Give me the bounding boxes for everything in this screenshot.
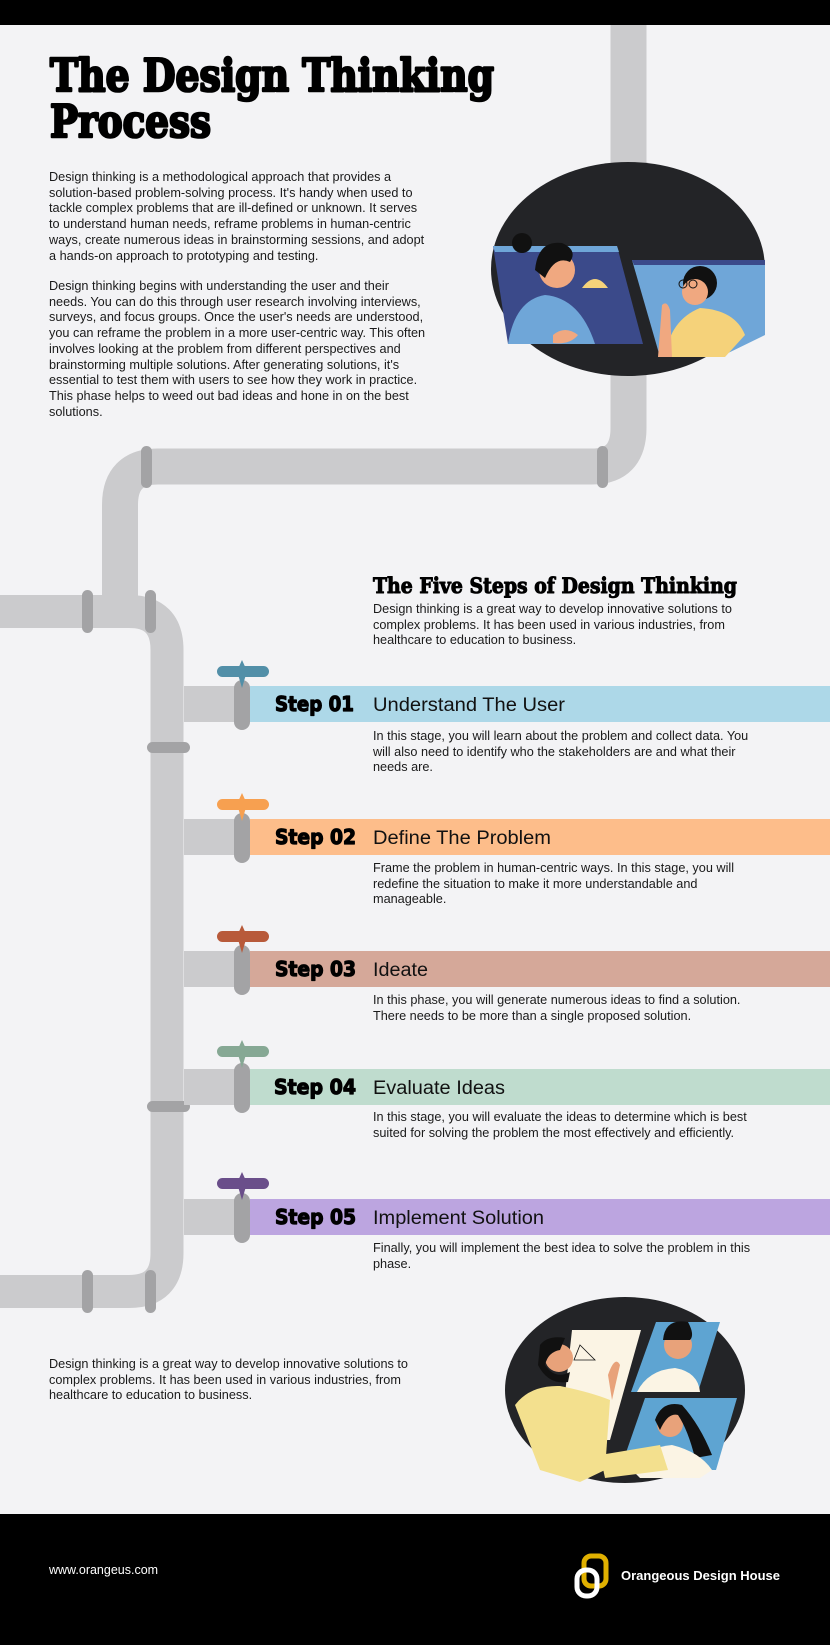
step 3 description: [373, 993, 740, 1023]
step titles: Implement Solution: [373, 1208, 544, 1229]
title: The Design Thinking: [50, 49, 494, 102]
footer: Orangeous Design House: [621, 1568, 780, 1583]
step 3 description: There needs to be more than a single proposed solution.: [373, 1009, 691, 1023]
step 4 description: [373, 1110, 747, 1140]
intro paragraph 2: [49, 279, 425, 419]
step 2 description: redefine the situation to make it more understandable and: [373, 877, 697, 891]
closing paragraph: Design thinking is a great way to develop innovative solutions to: [49, 1357, 408, 1371]
step 2 description: Frame the problem in human-centric ways. In this stage, you will: [373, 861, 734, 875]
step bands with valves: [184, 660, 830, 1243]
step titles: Ideate: [373, 960, 428, 981]
intro paragraph 1: solution-based problem-solving process. It's handy when used to: [49, 186, 413, 200]
footer: [0, 1514, 830, 1645]
step 1 description: In this stage, you will learn about the problem and collect data. You: [373, 729, 748, 743]
title: [50, 49, 494, 148]
intro paragraph 2: involves looking at the problem from different perspectives and: [49, 342, 401, 356]
step titles: [373, 695, 566, 1229]
intro paragraph 2: needs. You can do this through user research involving interviews,: [49, 295, 421, 309]
intro paragraph 2: you can reframe the problem in a more user-centric way. This often: [49, 326, 425, 340]
intro paragraph 2: solutions.: [49, 405, 103, 419]
five steps intro: complex problems. It has been used in various industries, from: [373, 618, 725, 632]
pipe: upper: [120, 25, 628, 612]
step 5 description: phase.: [373, 1257, 411, 1271]
footer: www.orangeus.com: [48, 1563, 158, 1577]
step 4 description: In this stage, you will evaluate the ideas to determine which is best: [373, 1110, 747, 1124]
five steps intro: healthcare to education to business.: [373, 633, 576, 647]
illustration: bottom circle: [505, 1297, 745, 1483]
intro paragraph 1: ways, create numerous ideas in brainstorming sessions, and adopt: [49, 233, 424, 247]
step 5 description: Finally, you will implement the best idea to solve the problem in this: [373, 1241, 750, 1255]
step labels: Step 05: [275, 1205, 356, 1229]
intro paragraph 1: to understand human needs, reframe problems in human-centric: [49, 217, 411, 231]
step 2 description: manageable.: [373, 892, 446, 906]
step 1 description: will also need to identify who the stakeholders are and what their: [373, 745, 736, 759]
step 3 description: In this phase, you will generate numerous ideas to find a solution.: [373, 993, 740, 1007]
heading: five steps: The Five Steps of Design Thinking: [373, 573, 737, 598]
intro paragraph 1: Design thinking is a methodological approach that provides a: [49, 170, 391, 184]
step 4 description: suited for solving the problem the most effectively and efficiently.: [373, 1126, 734, 1140]
step 2 description: [373, 861, 734, 906]
step labels: Step 02: [275, 825, 356, 849]
intro paragraph 1: [49, 170, 424, 263]
step 1 description: [373, 729, 748, 774]
closing paragraph: complex problems. It has been used in various industries, from: [49, 1373, 401, 1387]
step labels: Step 03: [275, 957, 356, 981]
intro paragraph 2: essential to test them with users to see how they work in practice.: [49, 373, 417, 387]
intro paragraph 1: tackle complex problems that are ill-defined or unknown. It serves: [49, 201, 417, 215]
intro paragraph 2: Design thinking begins with understanding the user and their: [49, 279, 389, 293]
step titles: Understand The User: [373, 695, 566, 716]
step labels: [274, 692, 356, 1229]
step labels: Step 01: [275, 692, 354, 716]
step labels: Step 04: [274, 1075, 356, 1099]
closing paragraph: [49, 1357, 408, 1402]
closing paragraph: healthcare to education to business.: [49, 1388, 252, 1402]
title: Process: [50, 95, 211, 148]
intro paragraph 1: a hands-on approach to prototyping and testing.: [49, 249, 318, 263]
five steps intro: [373, 602, 732, 647]
step titles: Evaluate Ideas: [373, 1078, 505, 1099]
step 5 description: [373, 1241, 750, 1271]
step 1 description: needs are.: [373, 760, 433, 774]
step titles: Define The Problem: [373, 828, 551, 849]
pipe: main vertical: [0, 590, 190, 1313]
five steps intro: Design thinking is a great way to develop innovative solutions to: [373, 602, 732, 616]
intro paragraph 2: brainstorming multiple solutions. After generating solutions, it's: [49, 358, 399, 372]
intro paragraph 2: surveys, and focus groups. Once the user's needs are understood,: [49, 310, 423, 324]
intro paragraph 2: This phase helps to weed out bad ideas and hone in on the best: [49, 389, 409, 403]
illustration: top circle: [491, 162, 765, 376]
